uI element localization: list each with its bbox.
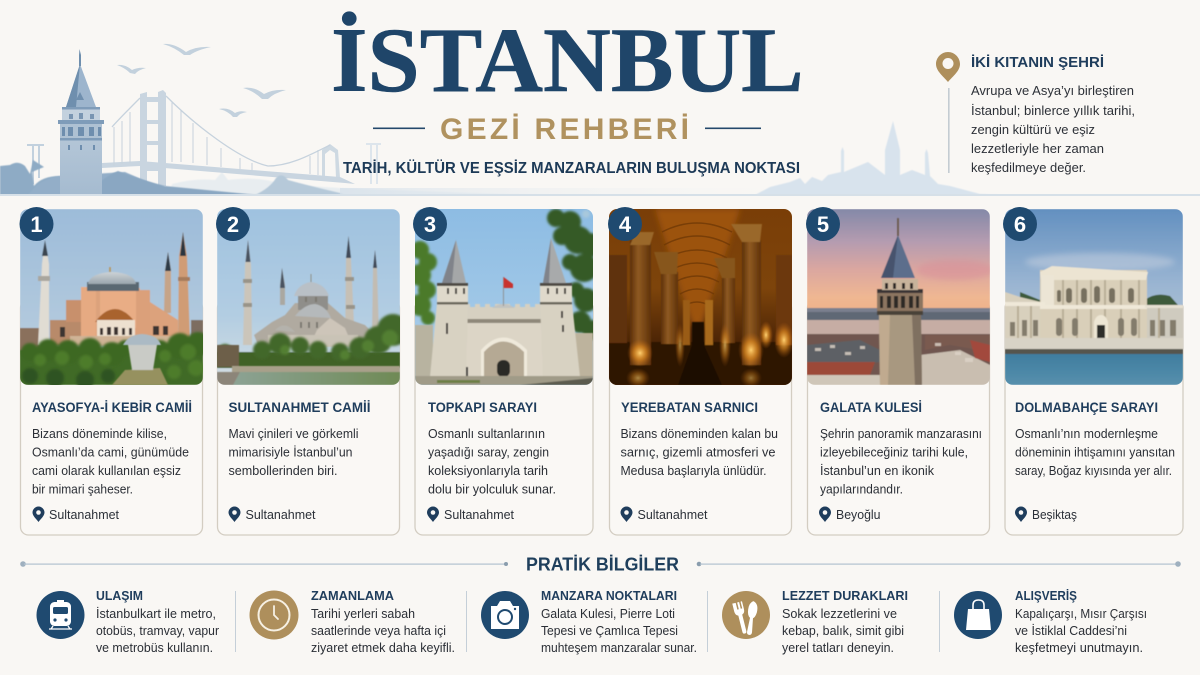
location: Sultanahmet (49, 507, 119, 522)
card title: YEREBATAN SARNICI (621, 400, 758, 415)
number badge 4 (608, 207, 642, 241)
location: Beyoğlu (836, 507, 880, 522)
icon: pylon right (366, 143, 381, 184)
section heading: pratik bilgiler: PRATİK BİLGİLER (526, 554, 679, 574)
icon: camera (481, 591, 529, 639)
icon: pylon left (27, 144, 44, 184)
tip text (782, 588, 908, 655)
panel: card 1 Ayasofya (20, 207, 210, 535)
panel: card 3 Topkapı (409, 207, 602, 535)
icon: fork and spoon (722, 591, 770, 639)
tip text: otobüs, tramvay, vapur (96, 624, 219, 638)
card description: Osmanlı sultanlarının (428, 427, 545, 441)
tip text: ULAŞIM (96, 588, 143, 603)
title: İSTANBUL (331, 10, 804, 112)
panel: card 6 Dolmabahçe (1003, 207, 1183, 535)
callout heading: İKİ KITANIN ŞEHRİ (971, 54, 1104, 71)
panel: card 2 Sultanahmet (216, 207, 409, 535)
tip text: saatlerinde veya hafta içi (311, 624, 446, 638)
tip: manzara noktaları (481, 588, 697, 655)
icon: galata tower (58, 49, 104, 195)
callout body: lezzetleriyle her zaman (971, 141, 1104, 156)
bridge (102, 90, 355, 187)
photo: Topkapı gate (409, 209, 602, 385)
icon: location pin (936, 52, 960, 82)
tip text: ZAMANLAMA (311, 588, 395, 603)
card title: SULTANAHMET CAMİİ (228, 400, 370, 415)
photo: Ayasofya (20, 209, 210, 389)
location: Sultanahmet (638, 507, 708, 522)
card description: Bizans döneminden kalan bu (620, 427, 778, 441)
tip: lezzet durakları (722, 588, 908, 655)
number badge 1: 1 (30, 212, 43, 237)
number badge 3 (413, 207, 447, 241)
tip text (96, 588, 219, 655)
tip text: keşfetmeyi unutmayın. (1015, 641, 1143, 655)
card description: izleyebileceğiniz tarihi kule, (820, 446, 968, 460)
number badge 4: 4 (619, 212, 632, 237)
panel: card 4 Yerebatan (608, 207, 794, 535)
card description (1015, 427, 1175, 478)
icon: tram (36, 591, 84, 639)
tip: zamanlama (250, 588, 455, 655)
card description: saray, Boğaz kıyısında yer alır. (1015, 464, 1172, 478)
card description: cami olarak kullanılan eşsiz (32, 464, 181, 478)
card description (428, 427, 556, 496)
section heading: pratik bilgiler (20, 554, 1181, 574)
callout body (971, 83, 1135, 175)
subtitle: gezi rehberi with rules: GEZİ REHBERİ (440, 113, 689, 146)
location: Sultanahmet (246, 507, 316, 522)
card description (820, 427, 982, 496)
card description: Mavi çinileri ve görkemli (228, 427, 358, 441)
card title: TOPKAPI SARAYI (428, 400, 537, 415)
photo: Basilica Cistern (609, 209, 794, 388)
tip text: yerel tatları deneyin. (782, 641, 894, 655)
card description: Bizans döneminde kilise, (32, 427, 167, 441)
card description: yapılarındandır. (820, 482, 903, 496)
tip text: Sokak lezzetlerini ve (782, 607, 897, 621)
tip text: ve metrobüs kullanın. (96, 641, 213, 655)
photo: Dolmabahçe Palace (1005, 209, 1183, 385)
number badge 3: 3 (424, 212, 436, 237)
tip text: muhteşem manzaralar sunar. (541, 641, 697, 655)
icon: seagulls (117, 44, 286, 117)
panel: card 5 Galata (806, 207, 993, 535)
tip text (311, 588, 455, 655)
tip text (541, 588, 697, 655)
card description: Osmanlı’da cami, günümüde (32, 446, 189, 460)
location (1015, 506, 1077, 522)
tip text: ve İstiklal Caddesi’ni (1015, 624, 1127, 638)
number badge 5: 5 (817, 212, 829, 237)
card description: döneminin ihtişamını yansıtan (1015, 446, 1175, 460)
number badge 5 (806, 207, 840, 241)
card title: AYASOFYA-İ KEBİR CAMİİ (32, 400, 192, 415)
card title: GALATA KULESİ (820, 400, 922, 415)
tip text: LEZZET DURAKLARI (782, 588, 908, 603)
tip text: ALIŞVERİŞ (1015, 588, 1077, 603)
callout: iki kıtanın şehri (936, 52, 1135, 175)
header skyline: right (755, 121, 1000, 195)
card description: İstanbul’un en ikonik (820, 464, 935, 478)
left hills (0, 160, 60, 195)
tip text: İstanbulkart ile metro, (96, 607, 216, 621)
number badge 6 (1003, 207, 1037, 241)
distant pale skyline (170, 172, 560, 195)
location: Beşiktaş (1032, 507, 1077, 522)
card description: Şehrin panoramik manzarasını (820, 427, 982, 441)
tip text: kebap, balık, simit gibi (782, 624, 904, 638)
tagline: TARİH, KÜLTÜR VE EŞSİZ MANZARALARIN BULUŞMA NOKTASI (343, 160, 800, 177)
tip text: Tarihi yerleri sabah (311, 607, 415, 621)
card description (32, 427, 189, 496)
tip text: ziyaret etmek daha keyifli. (311, 641, 455, 655)
location (819, 506, 880, 522)
tip text: Galata Kulesi, Pierre Loti (541, 607, 675, 621)
photo: Galata Tower at sunset (807, 209, 993, 385)
number badge 2: 2 (227, 212, 239, 237)
card description: yaşadığı saray, zengin (428, 446, 549, 460)
tip: alışveriş (954, 588, 1147, 655)
card description (228, 427, 358, 478)
card description: koleksiyonlarıyla tarih (428, 464, 548, 478)
card description: mimarisiyle İstanbul’un (228, 446, 353, 460)
card title: DOLMABAHÇE SARAYI (1015, 400, 1158, 415)
card description: Osmanlı’nın modernleşme (1015, 427, 1158, 441)
icon: clock (250, 590, 298, 640)
number badge 1 (20, 207, 54, 241)
tip text: MANZARA NOKTALARI (541, 588, 677, 603)
icon: shopping bag (954, 591, 1002, 639)
card description: dolu bir yolculuk sunar. (428, 482, 556, 496)
card description: bir mimari şaheser. (32, 482, 133, 496)
card description (620, 427, 778, 478)
card description: Medusa başlarıyla ünlüdür. (620, 464, 766, 478)
tip text: Kapalıçarşı, Mısır Çarşısı (1015, 607, 1147, 621)
header baseline rule (0, 194, 1200, 196)
number badge 6: 6 (1014, 212, 1026, 237)
card description: sarnıç, gizemli atmosferi ve (620, 446, 776, 460)
header skyline: left, tower, bridge and birds (0, 44, 560, 195)
photo: Sultanahmet Camii (217, 209, 409, 385)
tip text (1015, 588, 1147, 655)
card description: sembollerinden biri. (228, 464, 338, 478)
tip text: Tepesi ve Çamlıca Tepesi (541, 624, 678, 638)
tip: ulaşım (36, 588, 219, 655)
callout body: zengin kültürü ve eşiz (971, 122, 1095, 137)
callout body: İstanbul; binlerce yıllık tarihi, (971, 103, 1135, 118)
callout body: Avrupa ve Asya’yı birleştiren (971, 83, 1134, 98)
callout body: keşfedilmeye değer. (971, 160, 1086, 175)
number badge 2 (216, 207, 250, 241)
location: Sultanahmet (444, 507, 514, 522)
